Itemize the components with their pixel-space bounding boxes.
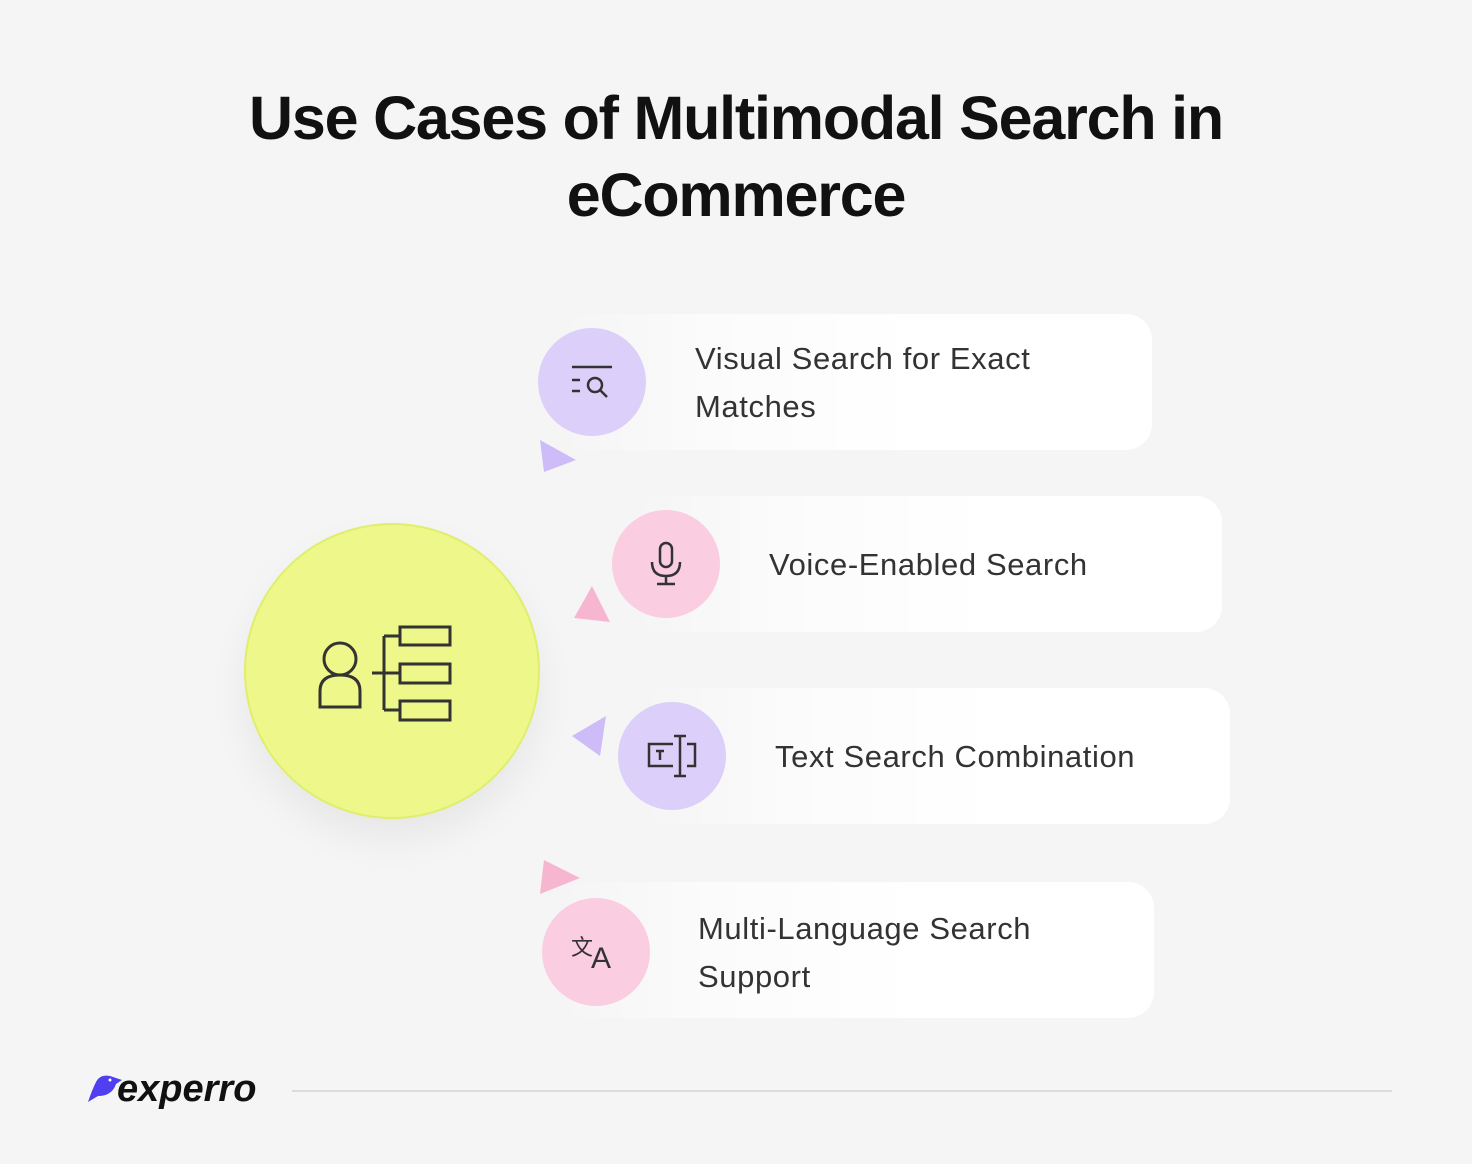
icon: text field xyxy=(618,702,726,810)
text: Visual Search for Exact xyxy=(695,341,1030,376)
title xyxy=(249,84,1223,229)
text: Text Search Combination xyxy=(775,739,1135,774)
title: Use Cases of Multimodal Search in xyxy=(249,84,1223,152)
arrow 4 xyxy=(540,860,580,894)
arrow 2 xyxy=(574,586,610,622)
logo: experro xyxy=(117,1068,256,1110)
card 3: text xyxy=(640,688,1230,824)
card 1: visual search xyxy=(560,314,1152,450)
icon: translate: 文 xyxy=(571,935,593,960)
icon: user hierarchy xyxy=(318,626,452,722)
footer line xyxy=(292,1090,1392,1092)
icon: visual search xyxy=(538,328,646,436)
icon: microphone xyxy=(612,510,720,618)
text: Voice-Enabled Search xyxy=(769,547,1088,582)
card 4: multi-language xyxy=(560,882,1154,1018)
arrow 1 xyxy=(540,440,576,472)
card 2: voice xyxy=(630,496,1222,632)
arrow 3 xyxy=(572,716,606,756)
central circle with icon xyxy=(244,523,540,819)
text: Matches xyxy=(695,389,816,424)
icon: translate xyxy=(542,898,650,1006)
text: Multi-Language Search xyxy=(698,911,1031,946)
text: Support xyxy=(698,959,811,994)
icon: translate: A xyxy=(591,942,611,975)
text xyxy=(695,341,1030,424)
text xyxy=(698,911,1031,994)
title: eCommerce xyxy=(567,161,905,229)
